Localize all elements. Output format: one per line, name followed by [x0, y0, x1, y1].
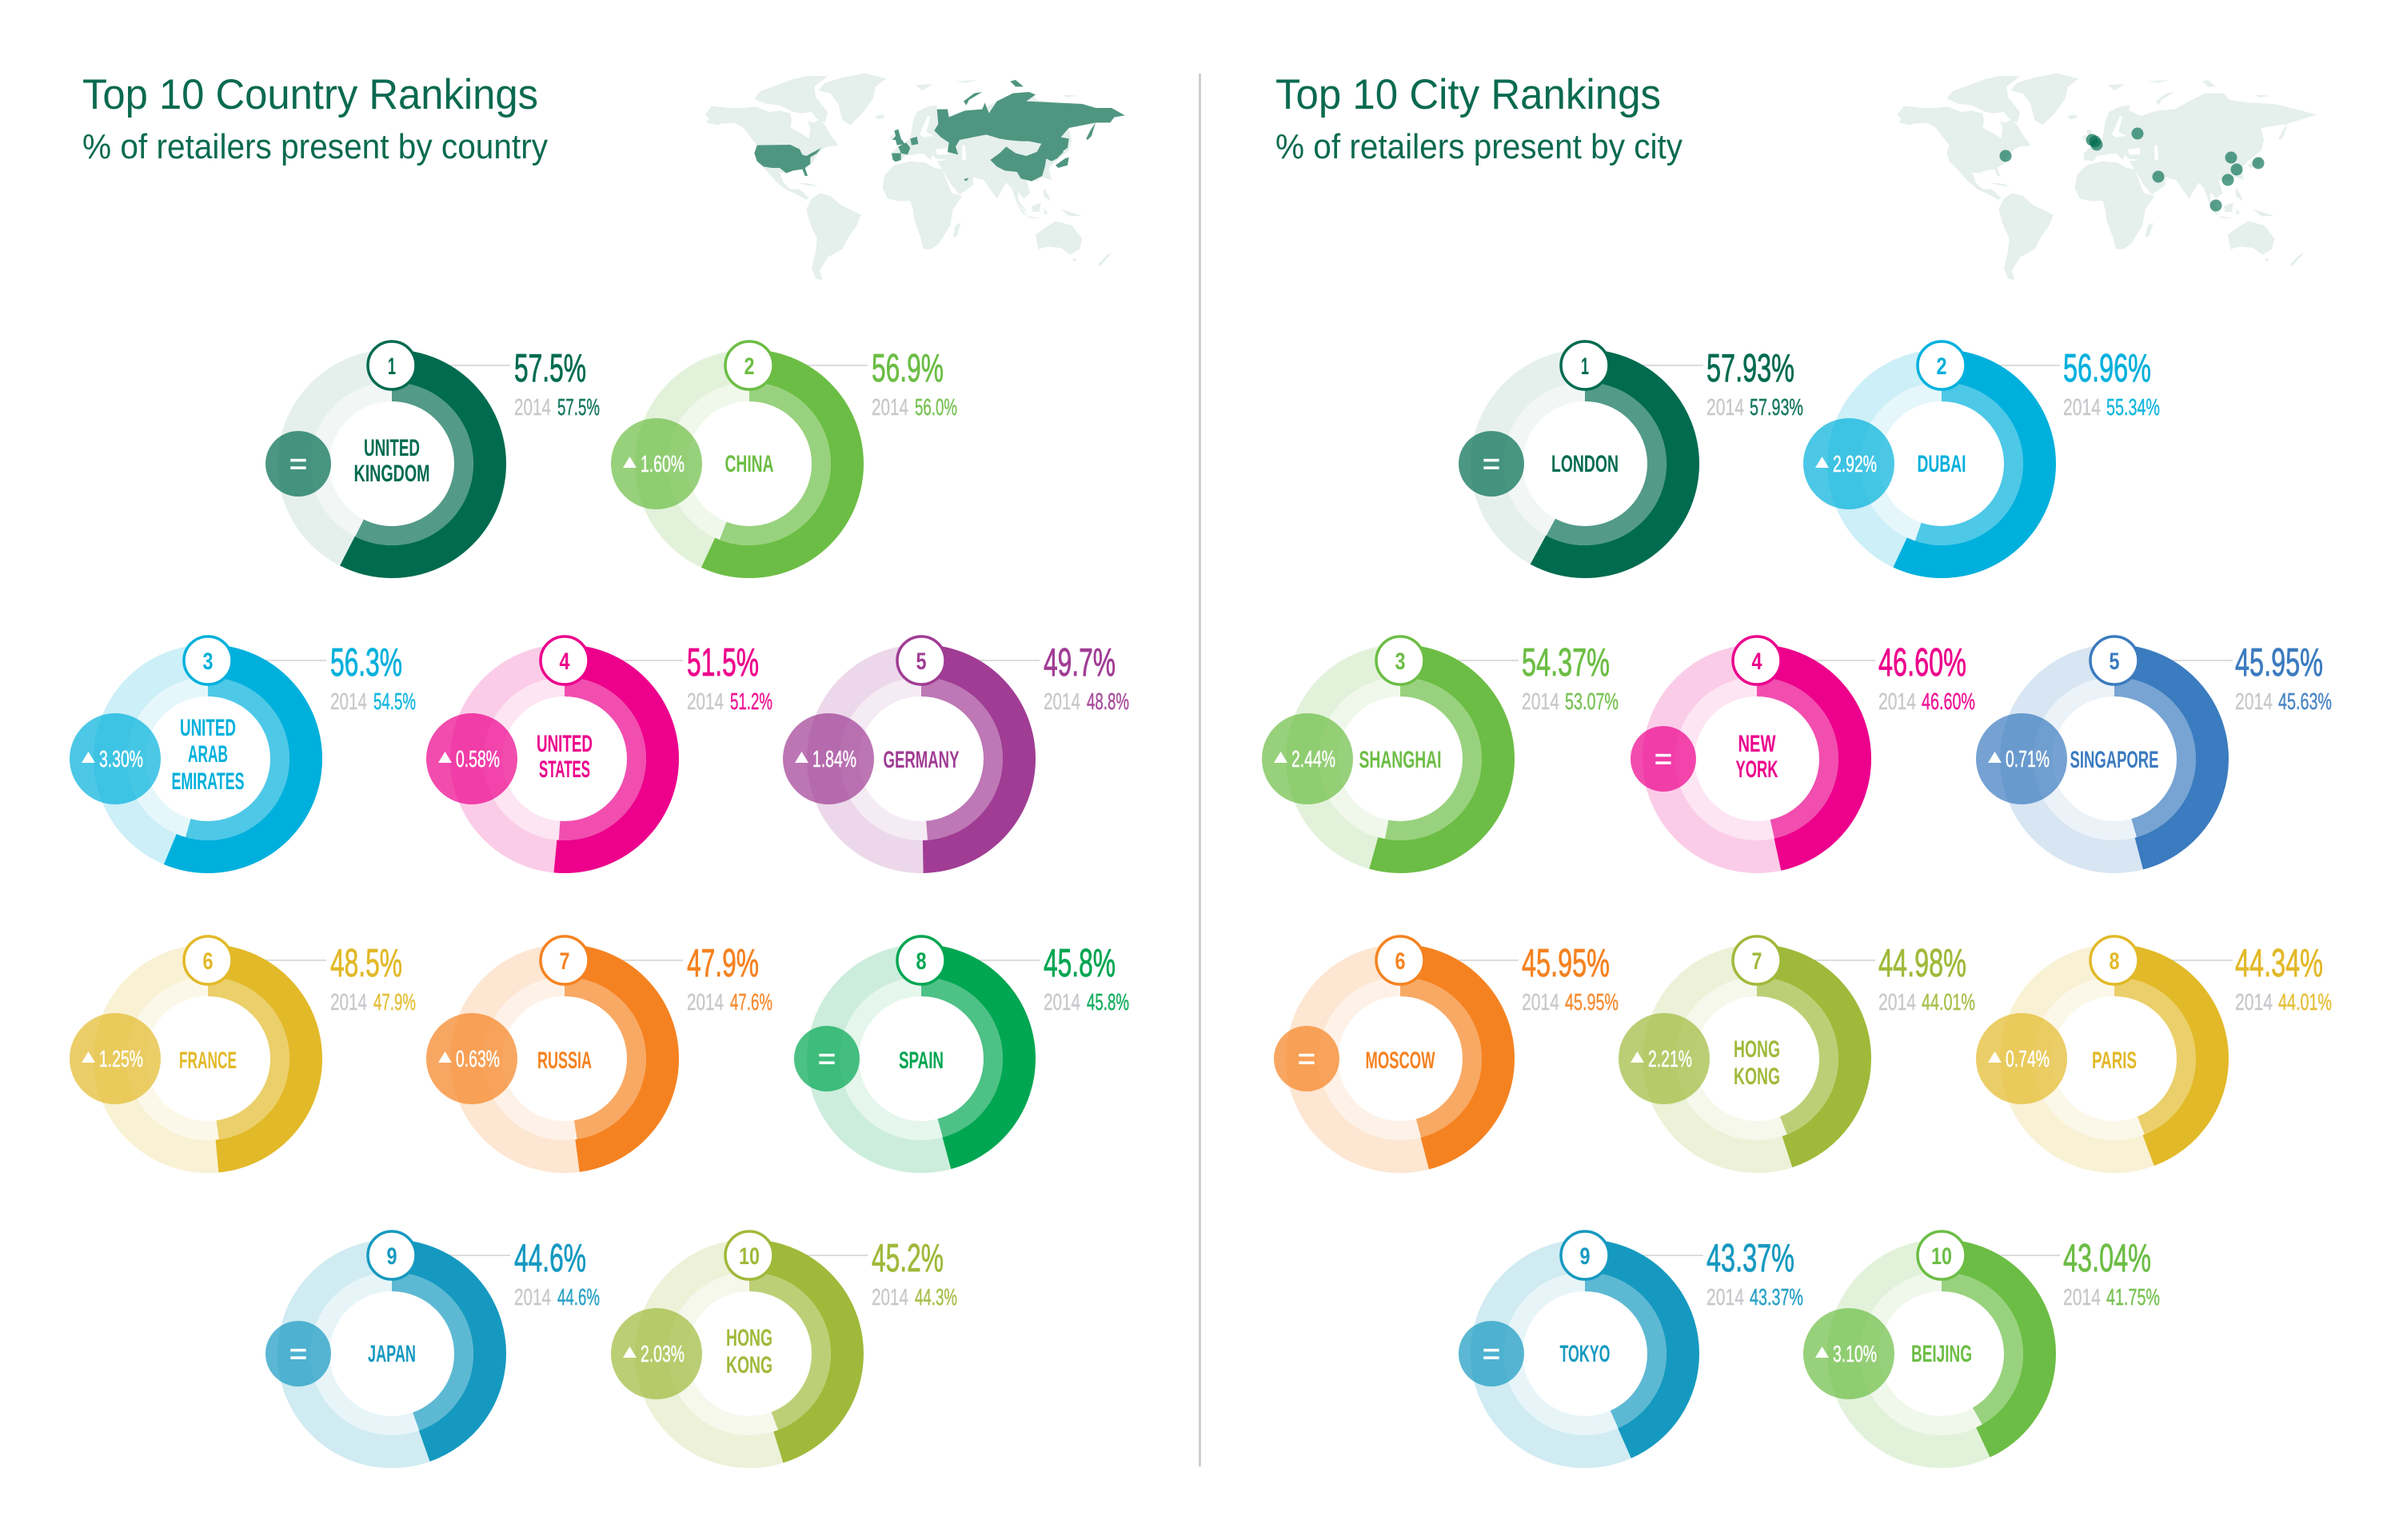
- change badge: 2.44%: [1291, 747, 1335, 772]
- name: CHINA: [724, 451, 774, 477]
- value: [514, 1237, 600, 1311]
- value: 51.2%: [730, 689, 772, 715]
- rank badge: [2090, 636, 2138, 684]
- change badge: [1274, 1026, 1339, 1091]
- value: 2014: [1522, 990, 1559, 1015]
- value: 44.6%: [557, 1285, 600, 1311]
- value: 2014: [1522, 689, 1559, 715]
- donut: Dubai: [1803, 341, 2160, 561]
- rank badge: [1376, 636, 1424, 684]
- value: 2014: [1878, 689, 1916, 715]
- change badge: 1.84%: [812, 747, 856, 772]
- value: 2014: [1706, 395, 1744, 421]
- rank badge: 9: [1580, 1243, 1590, 1270]
- value: 43.37%: [1750, 1285, 1803, 1311]
- value: 45.8%: [1044, 942, 1116, 985]
- value: 43.04%: [2063, 1237, 2151, 1280]
- map: highlighted countries: [704, 74, 1125, 280]
- name: UNITED: [537, 731, 593, 757]
- name: KONG: [1734, 1063, 1780, 1090]
- donut: United Arab Emirates: [70, 636, 416, 857]
- heading: country rankings: Top 10 Country Rankings: [82, 71, 538, 118]
- ring chart: [651, 365, 868, 561]
- change badge: [1976, 1013, 2067, 1104]
- change badge: [794, 1026, 860, 1091]
- rank badge: [368, 341, 416, 389]
- rank badge: [897, 936, 945, 984]
- panel: country rankings: [82, 71, 1125, 280]
- rank badge: 10: [739, 1243, 760, 1270]
- rank badge: 7: [1751, 948, 1762, 975]
- change badge: [611, 418, 702, 509]
- value: [1878, 942, 1975, 1015]
- name: PARIS: [2092, 1047, 2137, 1074]
- rank badge: 8: [2110, 948, 2119, 975]
- value: [514, 347, 600, 421]
- map: city dots: [1896, 74, 2317, 280]
- value: [687, 641, 772, 715]
- donut: New York: [1631, 636, 1975, 857]
- rank badge: 10: [1931, 1243, 1952, 1270]
- change badge: [783, 713, 874, 804]
- donut: China: [611, 341, 957, 561]
- rank badge: [184, 936, 232, 984]
- rank badge: [1733, 636, 1781, 684]
- value: 45.95%: [2235, 641, 2323, 684]
- rank badge: 2: [744, 353, 755, 380]
- name: GERMANY: [883, 747, 960, 773]
- change badge: 2.92%: [1833, 452, 1877, 477]
- change badge: [1619, 1013, 1710, 1104]
- value: [1522, 641, 1619, 715]
- change badge: 2.03%: [641, 1342, 685, 1367]
- donut: Singapore: [1976, 636, 2332, 857]
- divider between panels: [1199, 74, 1201, 1466]
- donut: Moscow: [1274, 936, 1619, 1156]
- change badge: 0.63%: [456, 1047, 500, 1072]
- rank badge: 3: [1395, 648, 1406, 675]
- ring chart: [110, 660, 326, 857]
- change badge: 0.74%: [2006, 1047, 2050, 1072]
- value: [2235, 942, 2332, 1015]
- value: 2014: [2235, 689, 2273, 715]
- rank badge: 7: [560, 948, 569, 975]
- value: 2014: [514, 395, 551, 421]
- value: [687, 942, 772, 1015]
- value: 51.5%: [687, 641, 759, 684]
- donut: Spain: [794, 936, 1129, 1156]
- rank badge: [368, 1231, 416, 1279]
- rank badge: [725, 341, 773, 389]
- rank badge: 6: [1395, 948, 1406, 975]
- ring chart: [1659, 960, 1875, 1156]
- change badge: [1262, 713, 1353, 804]
- change badge: 3.10%: [1833, 1342, 1877, 1367]
- change badge: =: [1483, 448, 1500, 481]
- value: 44.98%: [1878, 942, 1966, 985]
- value: 45.95%: [1522, 942, 1610, 985]
- ring chart: [1844, 1255, 2060, 1452]
- value: 2014: [872, 395, 908, 421]
- name: DUBAI: [1918, 451, 1966, 477]
- rank badge: [541, 636, 589, 684]
- name: UNITED: [180, 715, 236, 741]
- name: HONG: [726, 1325, 772, 1351]
- ring chart: [1487, 1255, 1703, 1452]
- value: 48.5%: [330, 942, 402, 985]
- change badge: [1803, 1308, 1894, 1399]
- ring chart: [294, 1255, 510, 1452]
- name: KONG: [726, 1352, 772, 1378]
- name: EMIRATES: [171, 768, 245, 795]
- value: 46.60%: [1922, 689, 1975, 715]
- change badge: [265, 431, 331, 497]
- rank badge: [1376, 936, 1424, 984]
- ring chart: [467, 660, 683, 857]
- value: 47.9%: [373, 990, 416, 1015]
- value: 43.37%: [1706, 1237, 1794, 1280]
- value: 45.2%: [872, 1237, 944, 1280]
- rank badge: 8: [916, 948, 926, 975]
- name: ARAB: [188, 741, 228, 768]
- change badge: 2.21%: [1648, 1047, 1692, 1072]
- rank badge: 6: [203, 948, 213, 975]
- value: 2014: [872, 1285, 908, 1311]
- donut: Tokyo: [1459, 1231, 1803, 1452]
- name: JAPAN: [368, 1341, 416, 1367]
- donut: London: [1459, 341, 1803, 561]
- rank badge: [1918, 1231, 1966, 1279]
- name: [726, 1325, 772, 1378]
- ring chart: [1302, 660, 1519, 857]
- value: 2014: [2063, 1285, 2101, 1311]
- change badge: [1631, 726, 1696, 792]
- rank badge: [1561, 1231, 1609, 1279]
- change badge: =: [1298, 1043, 1315, 1076]
- rank badge: [2090, 936, 2138, 984]
- rank badge: 1: [1581, 353, 1589, 380]
- value: 45.95%: [1565, 990, 1619, 1015]
- name: [353, 435, 430, 487]
- ring chart: [467, 960, 683, 1156]
- name: BEIJING: [1911, 1341, 1972, 1367]
- rank badge: 9: [387, 1243, 397, 1270]
- donut: Paris: [1976, 936, 2332, 1156]
- change badge: [1459, 431, 1524, 497]
- value: 56.96%: [2063, 347, 2151, 390]
- value: [330, 641, 416, 715]
- donut: Germany: [783, 636, 1129, 857]
- value: 55.34%: [2106, 395, 2160, 421]
- value: 44.01%: [2278, 990, 2332, 1015]
- ring chart: [1302, 960, 1519, 1156]
- change badge: =: [289, 448, 307, 481]
- value: 57.5%: [514, 347, 586, 390]
- value: [2063, 1237, 2160, 1311]
- name: SPAIN: [899, 1047, 944, 1074]
- donut: Shanghai: [1262, 636, 1619, 857]
- name: STATES: [539, 756, 590, 783]
- value: 44.34%: [2235, 942, 2323, 985]
- name: [171, 715, 245, 795]
- change badge: 3.30%: [99, 747, 143, 772]
- name: LONDON: [1551, 451, 1619, 477]
- value: [2235, 641, 2332, 715]
- donut: United Kingdom: [265, 341, 600, 561]
- value: 45.8%: [1087, 990, 1129, 1015]
- rank badge: [897, 636, 945, 684]
- name: MOSCOW: [1366, 1047, 1435, 1074]
- name: UNITED: [364, 435, 420, 461]
- change badge: 1.25%: [99, 1047, 143, 1072]
- ring chart: [294, 365, 510, 561]
- ring chart: [1844, 365, 2060, 561]
- ring chart: [824, 660, 1040, 857]
- rank badge: [184, 636, 232, 684]
- value: 2014: [1878, 990, 1916, 1015]
- rank badge: [725, 1231, 773, 1279]
- rank badge: 1: [388, 353, 396, 380]
- value: [1044, 942, 1129, 1015]
- value: 53.07%: [1565, 689, 1619, 715]
- value: 56.3%: [330, 641, 402, 684]
- change badge: [70, 1013, 161, 1104]
- rank badge: 5: [2110, 648, 2119, 675]
- rank badge: 5: [916, 648, 926, 675]
- change badge: =: [1655, 743, 1672, 776]
- heading: city rankings: Top 10 City Rankings: [1275, 71, 1661, 118]
- change badge: =: [1483, 1338, 1500, 1371]
- change badge: 1.60%: [641, 452, 685, 477]
- change badge: 0.58%: [456, 747, 500, 772]
- value: 2014: [687, 990, 724, 1015]
- value: 2014: [1044, 689, 1080, 715]
- value: 2014: [2063, 395, 2101, 421]
- rank badge: [1733, 936, 1781, 984]
- name: YORK: [1735, 756, 1778, 783]
- panel: city rankings: [1275, 71, 2317, 280]
- rank badge: [1918, 341, 1966, 389]
- donut: France: [70, 936, 416, 1156]
- value: [1522, 942, 1619, 1015]
- value: [330, 942, 416, 1015]
- value: 57.5%: [557, 395, 600, 421]
- change badge: [426, 1013, 517, 1104]
- change badge: [1459, 1321, 1524, 1386]
- name: NEW: [1738, 731, 1776, 757]
- ring chart: [824, 960, 1040, 1156]
- value: 48.8%: [1087, 689, 1129, 715]
- value: 56.0%: [915, 395, 957, 421]
- ring chart: [2017, 660, 2233, 857]
- name: [1734, 1036, 1780, 1090]
- value: 56.9%: [872, 347, 944, 390]
- value: 2014: [1044, 990, 1080, 1015]
- rank badge: 4: [1751, 648, 1762, 675]
- change badge: [265, 1321, 331, 1386]
- value: 41.75%: [2106, 1285, 2160, 1311]
- change badge: [426, 713, 517, 804]
- value: 44.01%: [1922, 990, 1975, 1015]
- name: KINGDOM: [353, 461, 430, 487]
- value: [1706, 1237, 1803, 1311]
- value: [872, 347, 957, 421]
- change badge: [1976, 713, 2067, 804]
- name: [537, 731, 593, 783]
- value: 2014: [2235, 990, 2273, 1015]
- change badge: =: [289, 1338, 307, 1371]
- value: [1044, 641, 1129, 715]
- value: 54.37%: [1522, 641, 1610, 684]
- value: 44.3%: [915, 1285, 957, 1311]
- value: 44.6%: [514, 1237, 586, 1280]
- name: RUSSIA: [537, 1047, 592, 1074]
- value: 2014: [330, 689, 367, 715]
- subheading: city: % of retailers present by city: [1275, 127, 1682, 166]
- ring chart: [1487, 365, 1703, 561]
- value: [1706, 347, 1803, 421]
- name: FRANCE: [179, 1047, 237, 1074]
- name: SHANGHAI: [1359, 747, 1441, 773]
- change badge: [611, 1308, 702, 1399]
- donut: United States: [426, 636, 772, 857]
- value: 57.93%: [1750, 395, 1803, 421]
- value: 2014: [514, 1285, 551, 1311]
- value: 2014: [1706, 1285, 1744, 1311]
- name: SINGAPORE: [2070, 747, 2159, 773]
- change badge: [1803, 418, 1894, 509]
- ring chart: [1659, 660, 1875, 857]
- value: 57.93%: [1706, 347, 1794, 390]
- ring chart: [2017, 960, 2233, 1156]
- subheading: country: % of retailers present by country: [82, 127, 548, 166]
- value: [872, 1237, 957, 1311]
- ring chart: [651, 1255, 868, 1452]
- name: TOKYO: [1559, 1341, 1611, 1367]
- change badge: =: [818, 1043, 836, 1076]
- rank badge: [541, 936, 589, 984]
- rank badge: 3: [203, 648, 213, 675]
- value: 2014: [330, 990, 367, 1015]
- value: 47.6%: [730, 990, 772, 1015]
- value: [2063, 347, 2160, 421]
- rank badge: 2: [1937, 353, 1946, 380]
- value: 54.5%: [373, 689, 416, 715]
- donut: Hong Kong city: [1619, 936, 1975, 1156]
- name: [1735, 731, 1778, 783]
- change badge: [70, 713, 161, 804]
- donut: Hong Kong: [611, 1231, 957, 1452]
- value: [1878, 641, 1975, 715]
- donut: Beijing: [1803, 1231, 2160, 1452]
- change badge: 0.71%: [2006, 747, 2050, 772]
- rank badge: [1561, 341, 1609, 389]
- rank badge: 4: [560, 648, 570, 675]
- ring chart: [110, 960, 326, 1156]
- name: HONG: [1734, 1036, 1780, 1063]
- value: 45.63%: [2278, 689, 2332, 715]
- value: 49.7%: [1044, 641, 1116, 684]
- donut: Japan: [265, 1231, 600, 1452]
- donut: Russia: [426, 936, 772, 1156]
- value: 47.9%: [687, 942, 759, 985]
- value: 46.60%: [1878, 641, 1966, 684]
- value: 2014: [687, 689, 724, 715]
